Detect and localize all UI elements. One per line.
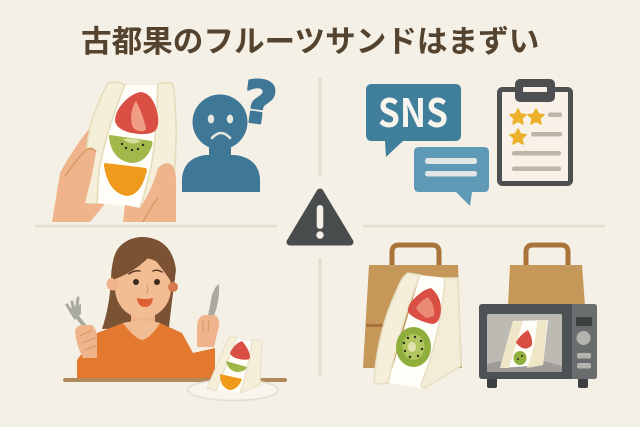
- icon: sandwich on plate: [207, 337, 262, 393]
- hair back: [102, 237, 176, 329]
- neck: [131, 310, 155, 328]
- icon: strawberry slice: [115, 92, 158, 134]
- face: [115, 258, 171, 318]
- icon: question mark: ?: [238, 67, 281, 139]
- title: 古都果のフルーツサンドはまずい: [81, 25, 539, 59]
- icon: fruit sandwich large: [374, 273, 461, 388]
- icon: woman: [77, 237, 215, 378]
- panel: SNS and reviews: [366, 79, 570, 206]
- panel: paper bag and microwave: [363, 245, 597, 388]
- icon: reply bubble: [414, 147, 489, 206]
- icon: paper bag: [363, 245, 462, 368]
- icon: SNS speech bubble: [366, 83, 461, 157]
- icon: microwave: [479, 304, 597, 388]
- icon: SNS speech bubble: SNS: [378, 83, 448, 139]
- icon: kiwi slice: [109, 135, 152, 163]
- icon: warning triangle: [290, 192, 350, 242]
- table: [63, 378, 287, 382]
- fringe: [112, 237, 175, 280]
- icon: left hand: [75, 325, 97, 358]
- icon: plate: [188, 380, 278, 400]
- panel: hand holding sandwich and confused person: [52, 67, 281, 222]
- icon: orange slice: [104, 163, 147, 196]
- icon: knife: [208, 284, 219, 316]
- icon: front fingers: [52, 148, 176, 222]
- panel: woman eating with fruit sandwich: [63, 237, 287, 400]
- icon: right hand: [197, 315, 219, 347]
- icon: hand back: [52, 125, 104, 222]
- icon: sandwich in microwave: [500, 320, 548, 368]
- icon: sandwich held: [83, 82, 176, 208]
- icon: paper bag behind microwave: [508, 245, 585, 306]
- icon: review clipboard: [500, 79, 570, 184]
- icon: confused person: [182, 94, 260, 192]
- icon: fork: [67, 298, 86, 328]
- sweater: [77, 323, 215, 378]
